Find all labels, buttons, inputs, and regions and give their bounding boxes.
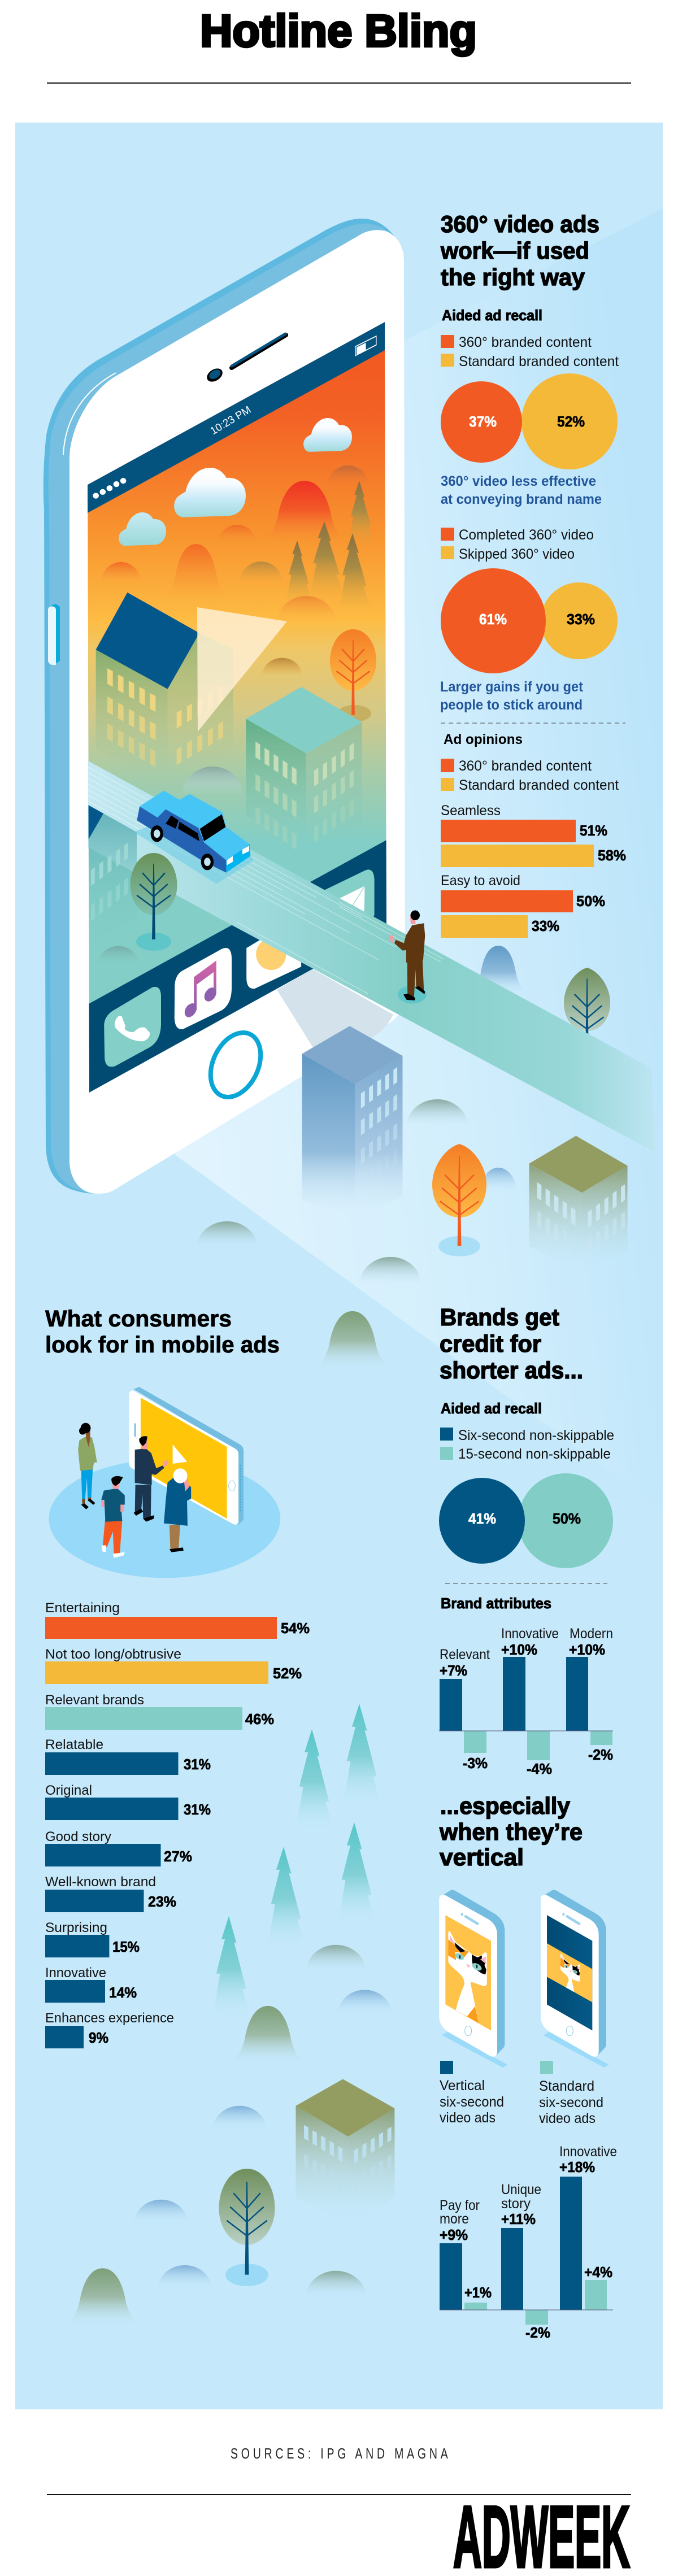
legend 1: 360° branded content (459, 334, 592, 350)
chart: brand attributes: +10% (501, 1641, 537, 1658)
background hills (101, 465, 375, 624)
pine trees (212, 1704, 382, 2021)
sources: SOURCES: IPG AND MAGNA (231, 2445, 448, 2462)
bar: Not too long: Not too long/obtrusive (45, 1647, 181, 1662)
bar: Relatable: Relatable (45, 1737, 103, 1752)
subheading: aided ad recall: Aided ad recall (442, 307, 542, 324)
heading: ...especially (440, 1792, 571, 1819)
legend: standard: six-second (539, 2095, 603, 2111)
chart: brand attributes: +7% (440, 1662, 467, 1679)
dock (89, 840, 386, 1093)
legend 3 (441, 758, 619, 793)
chart: brand attributes: Modern (570, 1626, 613, 1642)
chart: vertical lift: +18% (559, 2159, 595, 2175)
heading (440, 1304, 583, 1383)
orange tree (432, 1144, 486, 1256)
home button (201, 1025, 271, 1105)
heading: Brands get (440, 1304, 559, 1330)
mail app (324, 869, 375, 919)
bar: Surprising (45, 1920, 140, 1957)
legend: 15-second non-skippable (458, 1446, 611, 1462)
section: brands get credit (439, 1304, 614, 1777)
caption (440, 679, 584, 713)
circles 61 vs 33: 61% (479, 611, 507, 628)
bar: Well-known brand (45, 1874, 176, 1912)
blue-roof building (96, 593, 233, 782)
play triangle (197, 607, 287, 732)
subheading: ad opinions: Ad opinions (444, 732, 523, 747)
legend 2: Completed 360° video (459, 527, 594, 543)
road lane lines (88, 767, 444, 994)
domes and bells (66, 1945, 392, 2327)
chart: vertical lift: Unique (501, 2182, 541, 2198)
legend 2 (441, 527, 594, 562)
phone side button (48, 604, 60, 665)
caption: Larger gains if you get (440, 679, 584, 695)
woman in green (78, 1423, 97, 1509)
screen (88, 322, 386, 1093)
legend 3: Standard branded content (459, 777, 619, 793)
screen tree (130, 853, 177, 951)
scenery bottom left (66, 1704, 394, 2327)
orange tree on screen (330, 629, 376, 722)
chart: vertical lift: +1% (464, 2284, 492, 2301)
bar group: easy to avoid: 50% (576, 893, 605, 910)
bar: Enhances experience: Enhances experience (45, 2011, 174, 2026)
title: Hotline Bling (200, 6, 477, 56)
music app (175, 948, 232, 1029)
heading: when they’re (439, 1818, 583, 1845)
heading: vertical (440, 1844, 524, 1870)
bar: Enhances experience (45, 2011, 174, 2048)
chart: brand attributes: Innovative (501, 1626, 559, 1642)
status bar (88, 322, 385, 513)
circles 37 vs 52 (441, 373, 618, 469)
bar group: seamless: 58% (598, 847, 626, 864)
scenery around the phone (197, 1026, 628, 1370)
olive building (529, 1136, 628, 1272)
circles 61 vs 33 (441, 568, 618, 673)
road shadow on phone (277, 969, 393, 1050)
legend: vertical: video ads (440, 2110, 496, 2126)
bar: Surprising: Surprising (45, 1920, 107, 1935)
domes (197, 1099, 516, 1370)
phone face (69, 230, 405, 1194)
legend 3: 360° branded content (459, 758, 592, 774)
legend: standard: video ads (539, 2111, 596, 2126)
bar: Not too long (45, 1647, 302, 1684)
chart: vertical lift: +11% (501, 2211, 536, 2227)
bar: Entertaining: Entertaining (45, 1600, 120, 1616)
bar group: easy to avoid (441, 873, 605, 938)
chart: vertical lift: -2% (525, 2324, 550, 2341)
legend: standard (539, 2061, 603, 2126)
chart: brand attributes: -2% (588, 1746, 613, 1763)
caption: people to stick around (440, 697, 583, 713)
legend 2: Skipped 360° video (459, 546, 575, 562)
icon: phone vertical video (439, 1890, 507, 2068)
heading: look for in mobile ads (45, 1331, 280, 1357)
chart: vertical lift: Pay for (440, 2198, 480, 2213)
bar: Relevant brands: Relevant brands (45, 1692, 144, 1708)
bar: Relevant brands: 46% (245, 1711, 274, 1728)
screen background (88, 322, 386, 1093)
chart: brand attributes: -4% (527, 1760, 552, 1777)
legend 1 (441, 334, 619, 369)
chart: vertical lift (440, 2144, 617, 2341)
legend: standard: Standard (539, 2078, 594, 2094)
illustration: phone with city scene (44, 219, 655, 1194)
bar group: seamless: Seamless (441, 803, 501, 819)
bar: Relatable (45, 1737, 211, 1775)
icon: phone standard video (541, 1890, 609, 2068)
olive building lower (295, 2079, 394, 2223)
chart: vertical lift: Innovative (559, 2144, 617, 2160)
circles 37 vs 52: 52% (557, 413, 585, 430)
lower-left screen building and tree (88, 805, 177, 951)
heading (45, 1306, 280, 1357)
bar: Enhances experience: 9% (89, 2029, 108, 2046)
third app (246, 940, 302, 989)
man in teal shirt (101, 1476, 125, 1558)
bar: Entertaining (45, 1600, 310, 1639)
legend: vertical (440, 2061, 504, 2126)
bar: Well-known brand: Well-known brand (45, 1874, 156, 1890)
light beam from phone (175, 208, 663, 1510)
bar: Innovative (45, 1965, 137, 2003)
section: vertical ads (439, 1792, 617, 2341)
chart: brand attributes (439, 1626, 613, 1777)
illustration: people looking at phone (49, 1387, 280, 1578)
circles 41 vs 50: 50% (553, 1510, 581, 1527)
camera (205, 366, 225, 384)
caption (441, 473, 602, 507)
clouds (119, 418, 352, 546)
heading: 360° video ads (441, 211, 599, 237)
circles 41 vs 50: 41% (468, 1510, 496, 1527)
teal building (246, 687, 362, 850)
heading: shorter ads... (440, 1357, 583, 1383)
app icons (104, 869, 375, 1067)
chart: vertical lift: +9% (440, 2226, 468, 2243)
road (88, 761, 655, 1152)
section: 360 video ads (440, 211, 626, 938)
mini phone (129, 1387, 244, 1525)
bar: Relatable: 31% (184, 1756, 211, 1773)
section: what consumers look for (45, 1306, 310, 2048)
heading: What consumers (45, 1306, 232, 1331)
bar: Innovative: Innovative (45, 1965, 106, 1981)
bar group: seamless: 51% (580, 822, 607, 839)
dome hills mid (98, 658, 302, 965)
bar group: seamless (441, 803, 626, 867)
clock: 10:23 PM (208, 404, 253, 437)
bar: Good story: 27% (164, 1848, 192, 1865)
chart: vertical lift: +4% (584, 2264, 612, 2281)
caption: 360° video less effective (441, 473, 596, 489)
phone side (44, 219, 394, 1194)
car (134, 790, 253, 884)
heading (440, 211, 599, 290)
bar: Original: 31% (184, 1801, 211, 1818)
speaker (232, 334, 286, 368)
legend: vertical: six-second (440, 2094, 504, 2110)
bar: Innovative: 14% (109, 1984, 137, 2001)
legend: Six-second non-skippable (458, 1428, 614, 1443)
circles 41 vs 50 (439, 1473, 613, 1568)
older woman (164, 1468, 191, 1552)
bar: Well-known brand: 23% (148, 1893, 176, 1910)
bar group: easy to avoid: 33% (532, 917, 559, 934)
big blue building (302, 1026, 403, 1217)
heading: the right way (441, 264, 585, 290)
bar: Surprising: 15% (112, 1938, 140, 1955)
legend 1: Standard branded content (459, 354, 619, 369)
heading: work—if used (440, 237, 589, 264)
chart: brand attributes: -3% (463, 1755, 488, 1772)
heading: credit for (440, 1330, 541, 1357)
man in navy suit (133, 1436, 168, 1522)
bar group: easy to avoid: Easy to avoid (441, 873, 520, 889)
bar: Entertaining: 54% (281, 1620, 310, 1637)
chart: brand attributes: +10% (569, 1641, 605, 1658)
heading (439, 1792, 583, 1870)
circles 61 vs 33: 33% (567, 611, 595, 628)
bar: Good story (45, 1829, 192, 1866)
bar: Relevant brands (45, 1692, 274, 1730)
chart: vertical lift: story (501, 2196, 531, 2212)
bar: Not too long: 52% (273, 1665, 302, 1682)
tree lower (219, 2169, 275, 2286)
phone app (104, 987, 161, 1067)
chart: brand attributes: Relevant (440, 1647, 490, 1663)
caption: at conveying brand name (441, 491, 602, 507)
circles 37 vs 52: 37% (469, 413, 497, 430)
bar: Good story: Good story (45, 1829, 111, 1844)
battery (355, 336, 376, 356)
bar: Original: Original (45, 1783, 92, 1798)
chart: vertical lift: more (440, 2211, 469, 2227)
scenery behind the road (470, 946, 610, 1056)
legend (440, 1428, 614, 1462)
subheading: brand attributes: Brand attributes (441, 1595, 551, 1612)
signal dots (93, 478, 126, 499)
man on road (389, 910, 427, 1004)
subheading: aided ad recall: Aided ad recall (441, 1400, 542, 1417)
legend: vertical: Vertical (440, 2078, 485, 2094)
bar: Original (45, 1783, 211, 1820)
